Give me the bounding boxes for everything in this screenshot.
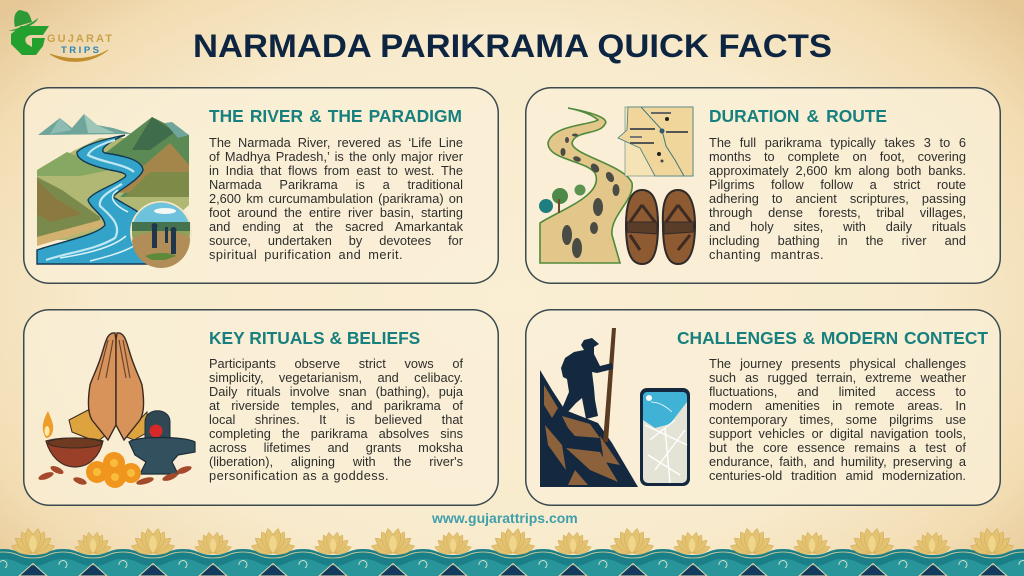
body text: Pilgrims follow follow a strict route (709, 177, 966, 192)
logo: Gujarat Trips (8, 10, 112, 62)
body text: and ending at the sacred Amarkantak (209, 219, 463, 234)
illustration: river valley (36, 114, 192, 268)
body text: including bathing in the river and (709, 233, 966, 248)
body text: months to complete on foot, covering (709, 149, 966, 164)
body text: The journey presents physical challenges (709, 356, 966, 371)
heading: THE RIVER & THE PARADIGM (209, 106, 462, 126)
panel: duration and route (525, 87, 1001, 284)
body text: but the core essence remains a test of (709, 440, 966, 455)
body text: chanting mantras. (709, 247, 824, 262)
body text (209, 135, 463, 262)
heading: DURATION & ROUTE (709, 106, 887, 126)
body text: adhering to ancient scriptures, passing (709, 191, 966, 206)
body text: 2,600 km curcumambulation (parikrama) on (209, 191, 463, 206)
body text: and holy sites, with daily rituals (709, 219, 966, 234)
body text: (liberation), aligning with the river's (209, 454, 463, 469)
body text: at riverside temples, and parikrama of (209, 398, 463, 413)
heading: KEY RITUALS & BELIEFS (209, 328, 420, 348)
logo: Gujarat Trips: TRIPS (61, 45, 99, 56)
body text: contemporary times, some pilgrims use (709, 412, 966, 427)
illustration: praying hands, lamp, lingam and marigolds (38, 332, 196, 488)
panel: the river and the paradigm (23, 87, 499, 284)
body text: Narmada Parikrama is a traditional (209, 177, 463, 192)
body text: simplicity, vegetarianism, and celibacy. (209, 370, 463, 385)
body text (709, 135, 966, 262)
body text: through dense forests, tribal villages, (709, 205, 966, 220)
body text: spiritual purification and merit. (209, 247, 403, 262)
body text: fluctuations, and limited access to (709, 384, 966, 399)
body text: local shrines. It is believed that (209, 412, 463, 427)
body text: modern amenities in remote areas. In (709, 398, 966, 413)
body text: personification as a goddess. (209, 468, 389, 483)
heading: CHALLENGES & MODERN CONTECT (677, 328, 988, 348)
body text: completing the parikrama absolves sins (209, 426, 463, 441)
title: NARMADA PARIKRAMA QUICK FACTS (193, 28, 832, 64)
illustration: hiker on rocks and phone map (540, 328, 690, 487)
footer border: lotus and waves (0, 528, 1024, 576)
body text: such as rugged terrain, extreme weather (709, 370, 966, 385)
body text: centuries-old tradition amid modernization. (709, 468, 966, 483)
panel: key rituals and beliefs (23, 309, 499, 506)
body text (709, 356, 966, 483)
body text: The full parikrama typically takes 3 to 6 (709, 135, 966, 150)
body text: support vehicles or digital navigation tools, (709, 426, 966, 441)
logo: Gujarat Trips: GUJARAT (47, 33, 112, 45)
panel: challenges and modern context (525, 309, 1001, 506)
body text: source, undertaken by devotees for (209, 233, 463, 248)
body text (209, 356, 464, 483)
body text: Participants observe strict vows of (209, 356, 463, 371)
body text: across lifetimes and grants moksha (209, 440, 463, 455)
illustration: road, map and sandals (539, 106, 696, 265)
body text: in India that flows from east to west. The (209, 163, 463, 178)
website url: www.gujarattrips.com (432, 510, 578, 526)
body text: foot around the entire river basin, starting (209, 205, 463, 220)
body text: of Madhya Pradesh,’ is the only major river (209, 149, 463, 164)
body text: endurance, faith, and humility, preserving a (709, 454, 966, 469)
body text: Daily rituals involve snan (bathing), puja (209, 384, 463, 399)
body text: approximately 2,600 km along both banks. (709, 163, 966, 178)
body text: The Narmada River, revered as ‘Life Line (209, 135, 463, 150)
